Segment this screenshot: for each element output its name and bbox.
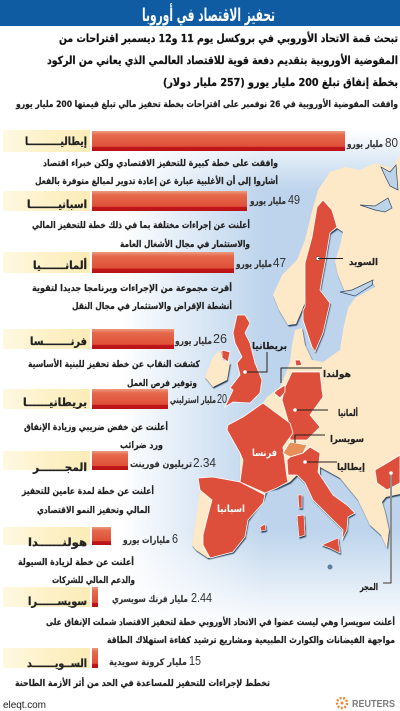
row: Hungary: أعلنت عن خطة لمدة عامين للتحفيز	[21, 485, 154, 497]
country: Sicily	[322, 538, 340, 553]
row: Netherlands: أعلنت عن خطة لزيادة السيولة	[18, 556, 134, 568]
map callout: Switzerland: سويسرا	[330, 435, 364, 445]
row: Germany	[3, 252, 286, 312]
country: Denmark islands	[295, 360, 302, 366]
row: Spain: والاستثمار في مجال الأشغال العامة	[120, 238, 250, 250]
row: Britain: بريطانيــــــا	[23, 396, 87, 409]
row: Netherlands: مليارات يورو	[122, 536, 170, 546]
map callout: Britain	[243, 342, 287, 374]
country: Netherlands	[274, 385, 285, 398]
Reuters logo	[337, 698, 395, 710]
map callout: Switzerland	[295, 435, 364, 445]
country: Italy	[287, 447, 355, 540]
row: Sweden: الســويـــــــد	[27, 657, 87, 670]
country: United Kingdom	[225, 315, 262, 407]
row: France	[3, 329, 227, 389]
row: Germany: مليار يورو	[235, 260, 272, 270]
row: Sweden: 15	[189, 653, 201, 668]
map callout: Hungary: المجر	[359, 583, 378, 593]
map callout: Britain: بريطانيا	[252, 342, 287, 352]
row: Italy: 80	[385, 135, 398, 150]
row: France: 26	[213, 331, 227, 346]
country: Corsica	[298, 495, 302, 508]
country: Northern Ireland	[222, 350, 230, 362]
title: تحفيز الاقتصاد في أوروبا	[142, 3, 275, 26]
country: France	[227, 403, 293, 493]
country: Hungary	[375, 455, 400, 490]
row: Hungary	[3, 451, 216, 516]
map label: Spain: اسبانيا	[217, 504, 245, 515]
row: Sweden: مليار كرونة سويدية	[109, 658, 187, 668]
row: Sweden	[3, 648, 270, 689]
row: Netherlands	[3, 527, 178, 586]
country: Spain	[198, 477, 265, 558]
row: Italy: وافقت على خطة كبيرة للتحفيز الاقتصادي ولكن خبراء اقتصاد	[43, 159, 278, 169]
row: Netherlands: والدعم المالي للشركات	[52, 576, 135, 586]
map label: France: فرنسا	[252, 448, 277, 459]
row: Hungary: المالي وتحفيز النمو الاقتصادي	[37, 506, 150, 516]
header banner	[0, 0, 400, 26]
row: Britain: مليار استرليني	[170, 396, 216, 406]
country: Sardinia	[297, 515, 305, 537]
map callout: Sweden	[316, 256, 378, 268]
red countries	[198, 200, 400, 558]
row: Hungary: تريليون فورينت	[130, 460, 192, 470]
country: Germany	[282, 372, 323, 440]
map callout: Germany: ألمانيا	[338, 407, 358, 419]
row: Switzerland	[3, 587, 395, 646]
row: France: مليار يورو	[174, 337, 212, 347]
country: Sweden	[303, 200, 337, 352]
country: Switzerland	[283, 442, 307, 457]
row: France: وتوفير فرص العمل	[127, 379, 197, 389]
row: Britain: 20	[217, 391, 227, 406]
land: northern and eastern Europe	[192, 155, 400, 558]
row: Germany: أنشطة الإقراض والاستثمار في مجال النقل	[72, 300, 232, 312]
map callout: Italy	[303, 460, 365, 473]
intro text	[15, 31, 398, 110]
row: Britain: أعلنت عن خفض ضريبي وزيادة الإنفاق	[24, 421, 168, 433]
map callout: Sweden: السويد	[349, 258, 378, 268]
northern seas	[340, 165, 398, 296]
map callout: Netherlands	[281, 368, 351, 383]
row: Britain: ورد ضرائب	[120, 441, 163, 451]
row: Switzerland: مليار فرنك سويسري	[112, 595, 188, 605]
row: Spain	[3, 191, 300, 250]
row: Italy: أشاروا إلى أن الأغلبية عبارة عن إعادة تدوير لمبالغ متوفرة بالفعل	[35, 175, 278, 187]
row: Italy: إيطاليــــــــــا	[25, 135, 87, 148]
row: Netherlands: 6	[172, 531, 178, 546]
row: Switzerland: 2.44	[191, 590, 212, 605]
row: Italy: مليار يورو	[346, 140, 383, 150]
row: France: كشفت النقاب عن خطة تحفيز للبنية الأساسية	[28, 358, 201, 370]
map callout: Germany	[293, 407, 358, 419]
row: Hungary: المجـــــــر	[32, 461, 87, 474]
row: Spain: 49	[288, 192, 300, 207]
map of Europe	[0, 130, 400, 630]
red islands	[260, 495, 340, 553]
island: Malta	[328, 564, 332, 570]
row: France: فرنــــــــسا	[30, 335, 87, 348]
row: Hungary: 2.34	[193, 455, 216, 470]
map callout: Netherlands: هولندا	[323, 370, 351, 380]
row: Italy	[3, 130, 398, 187]
source watermark: eleqt.com	[3, 700, 46, 711]
row: Britain	[3, 389, 227, 451]
map callout: Hungary	[359, 471, 393, 593]
row: Spain: اسبانيــــــــا	[27, 198, 87, 211]
row: Netherlands: هولنــــــدا	[28, 536, 87, 549]
row: Germany: 47	[273, 255, 286, 270]
row: Germany: أقرت مجموعة من الإجراءات وبرنامجا جديدا لتقوية	[32, 282, 232, 294]
row: Germany: ألمانـــــــيا	[33, 258, 87, 272]
row: Spain: أعلنت عن إجراءات مختلفة بما في ذلك خطة للتحفيز المالي	[32, 219, 250, 231]
row: Switzerland: سويســــــرا	[28, 595, 87, 608]
country: Balearic island	[260, 524, 266, 531]
map callout: Italy: إيطاليا	[337, 463, 365, 473]
Reuters logo: REUTERS	[352, 699, 395, 710]
row: Spain: مليار يورو	[249, 197, 286, 207]
row: Sweden: تخطط لإجراءات للتحفيز للمساعدة في الحد من أثر الأزمة الطاحنة	[15, 677, 270, 689]
